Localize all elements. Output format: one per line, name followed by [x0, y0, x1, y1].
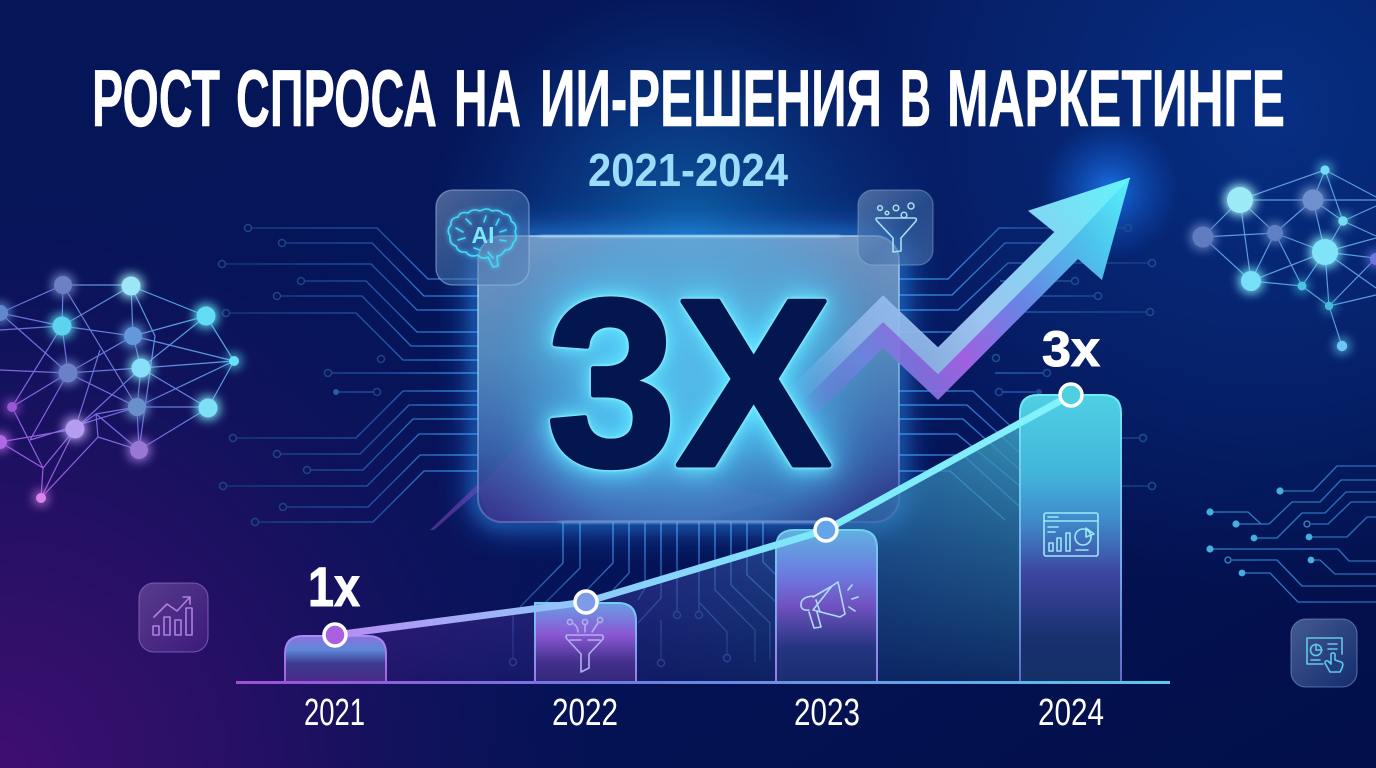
area under trend line	[364, 428, 1019, 681]
title: РОСТ	[92, 54, 220, 144]
zigzag growth arrow	[792, 178, 1130, 420]
value label 3x: 3x	[1042, 321, 1100, 377]
main panel	[430, 235, 899, 530]
year labels: 2024	[1038, 692, 1104, 734]
title: СПРОСА	[236, 54, 437, 144]
circuit lines: right of panel	[899, 224, 1156, 520]
icon tile: dashboard click	[1291, 619, 1357, 687]
neural network: left	[0, 276, 239, 503]
year labels: 2022	[552, 692, 618, 734]
icon tile: funnel	[858, 190, 933, 265]
year labels	[304, 692, 1104, 734]
subtitle years: 2021-2024	[588, 144, 788, 196]
circuit lines: left of panel	[218, 224, 478, 526]
bar 2024	[1020, 395, 1121, 682]
big 3X: 3X	[547, 251, 831, 516]
trend line with nodes	[324, 384, 1082, 646]
value label 1x: 1x	[308, 555, 360, 618]
bar 2022	[535, 603, 636, 682]
circuit lines: below panel	[510, 522, 776, 666]
icon tile: AI brain	[436, 190, 529, 285]
title	[92, 54, 1285, 144]
year labels: 2021	[304, 692, 365, 734]
icon tile: growth chart	[139, 583, 208, 652]
title: В	[900, 54, 931, 144]
year labels: 2023	[794, 692, 860, 734]
circuit lines: far right	[1206, 466, 1376, 602]
bar 2023	[776, 530, 877, 682]
icon tile: AI brain: AI	[472, 222, 494, 248]
neural network: right	[1192, 165, 1376, 351]
bar 2021	[285, 636, 386, 682]
title: НА	[454, 54, 521, 144]
title: ИИ-РЕШЕНИЯ	[540, 54, 882, 144]
axis baseline	[236, 681, 1170, 684]
